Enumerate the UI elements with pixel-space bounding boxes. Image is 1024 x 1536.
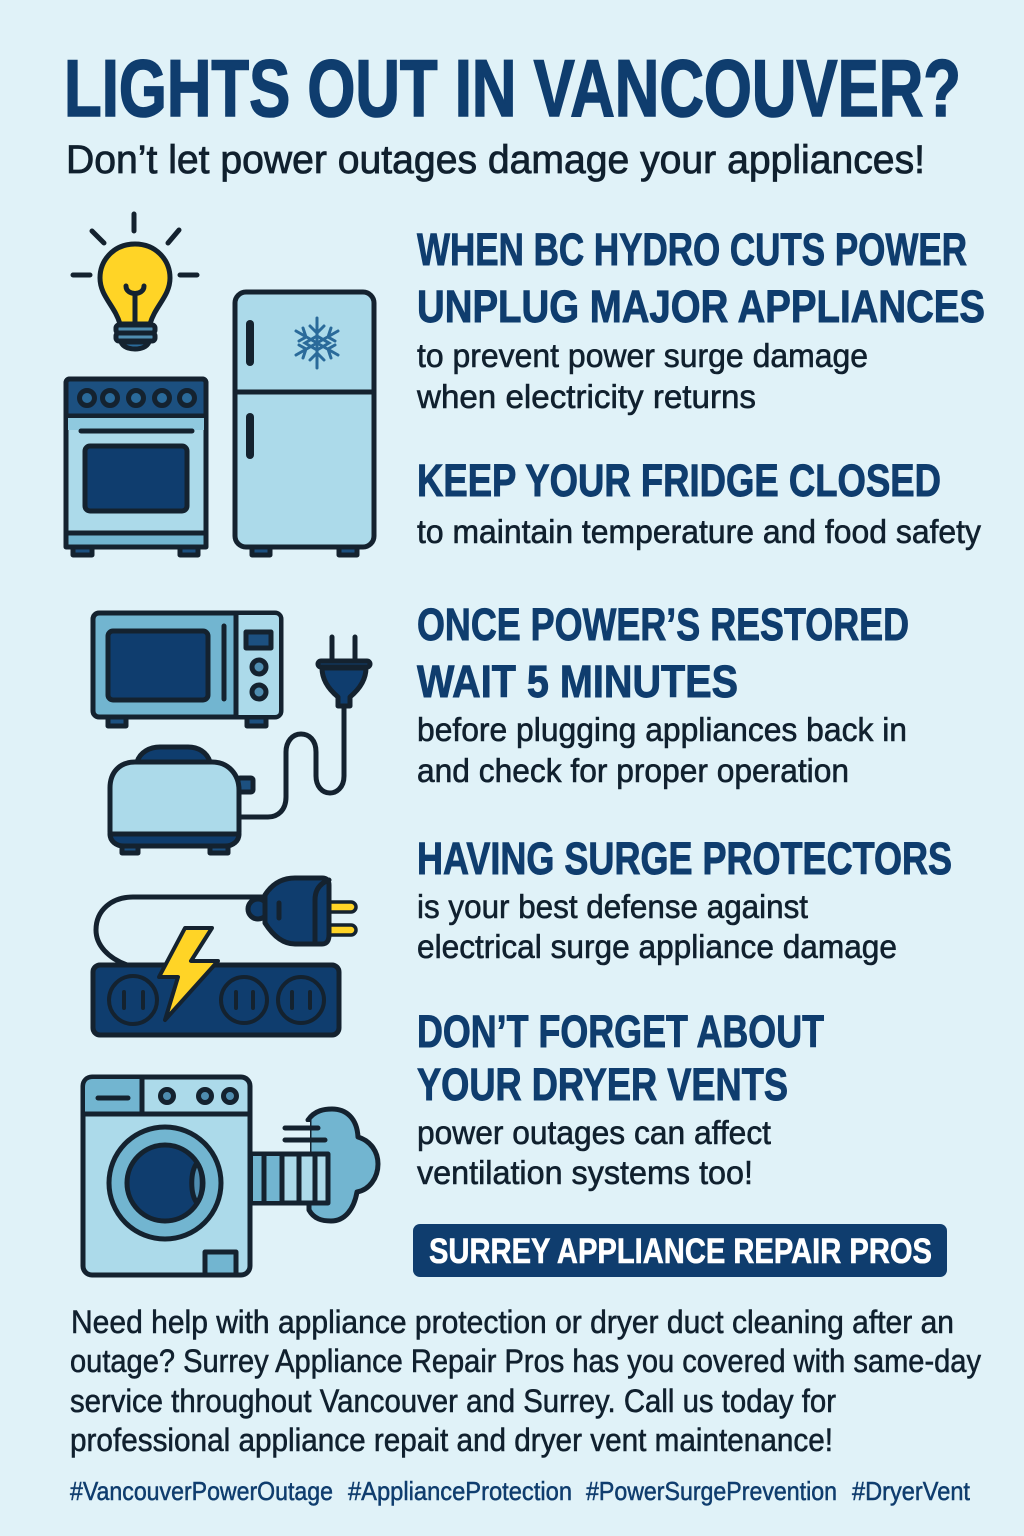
tip: unplug major appliances — [416, 224, 985, 415]
call to action paragraph: professional appliance repait and dryer vent maintenance! — [70, 1422, 833, 1458]
tip: surge protectors — [417, 833, 952, 965]
company banner: SURREY APPLIANCE REPAIR PROS — [429, 1232, 932, 1271]
icon: toaster with cord and plug — [110, 637, 370, 853]
icon: snowflake — [296, 318, 338, 368]
subtitle: Don’t let power outages damage your appliances! — [66, 138, 925, 182]
body text: to maintain temperature and food safety — [417, 513, 981, 550]
tip: wait five minutes — [417, 599, 909, 789]
heading: YOUR DRYER VENTS — [417, 1059, 788, 1110]
icon: stove — [66, 379, 206, 555]
call to action paragraph: Need help with appliance protection or dryer duct cleaning after an — [71, 1304, 954, 1340]
tip: dryer vents — [417, 1006, 824, 1191]
body text: is your best defense against — [417, 888, 808, 925]
icon: surge protector strip with plug and bolt — [93, 878, 356, 1035]
icon: microwave — [93, 613, 281, 726]
icon: light bulb — [73, 214, 197, 349]
icon: dryer with vent and air cloud — [83, 1077, 378, 1275]
body text: and check for proper operation — [417, 752, 849, 789]
body text: power outages can affect — [417, 1114, 771, 1151]
heading: WAIT 5 MINUTES — [417, 656, 738, 707]
hashtags: #DryerVent — [852, 1476, 971, 1506]
call to action paragraph: service throughout Vancouver and Surrey. Call us today for — [70, 1383, 836, 1419]
company banner — [413, 1224, 947, 1277]
call to action paragraph — [70, 1304, 981, 1458]
hashtags: #ApplianceProtection — [348, 1476, 572, 1506]
hashtags — [70, 1476, 971, 1506]
hashtags: #VancouverPowerOutage — [70, 1476, 333, 1506]
body text: electrical surge appliance damage — [417, 928, 897, 965]
icon: air cloud — [308, 1109, 378, 1221]
body text: ventilation systems too! — [417, 1154, 753, 1191]
icon: fridge — [235, 292, 374, 555]
icon: vent duct — [251, 1154, 328, 1203]
tip: keep fridge closed — [417, 455, 981, 550]
body text: to prevent power surge damage — [417, 337, 868, 374]
hashtags: #PowerSurgePrevention — [586, 1476, 837, 1506]
body text: before plugging appliances back in — [417, 711, 907, 748]
heading: DON’T FORGET ABOUT — [417, 1006, 824, 1057]
body text: when electricity returns — [416, 378, 756, 415]
heading: ONCE POWER’S RESTORED — [417, 599, 909, 650]
icon: lightning bolt — [159, 928, 218, 1020]
